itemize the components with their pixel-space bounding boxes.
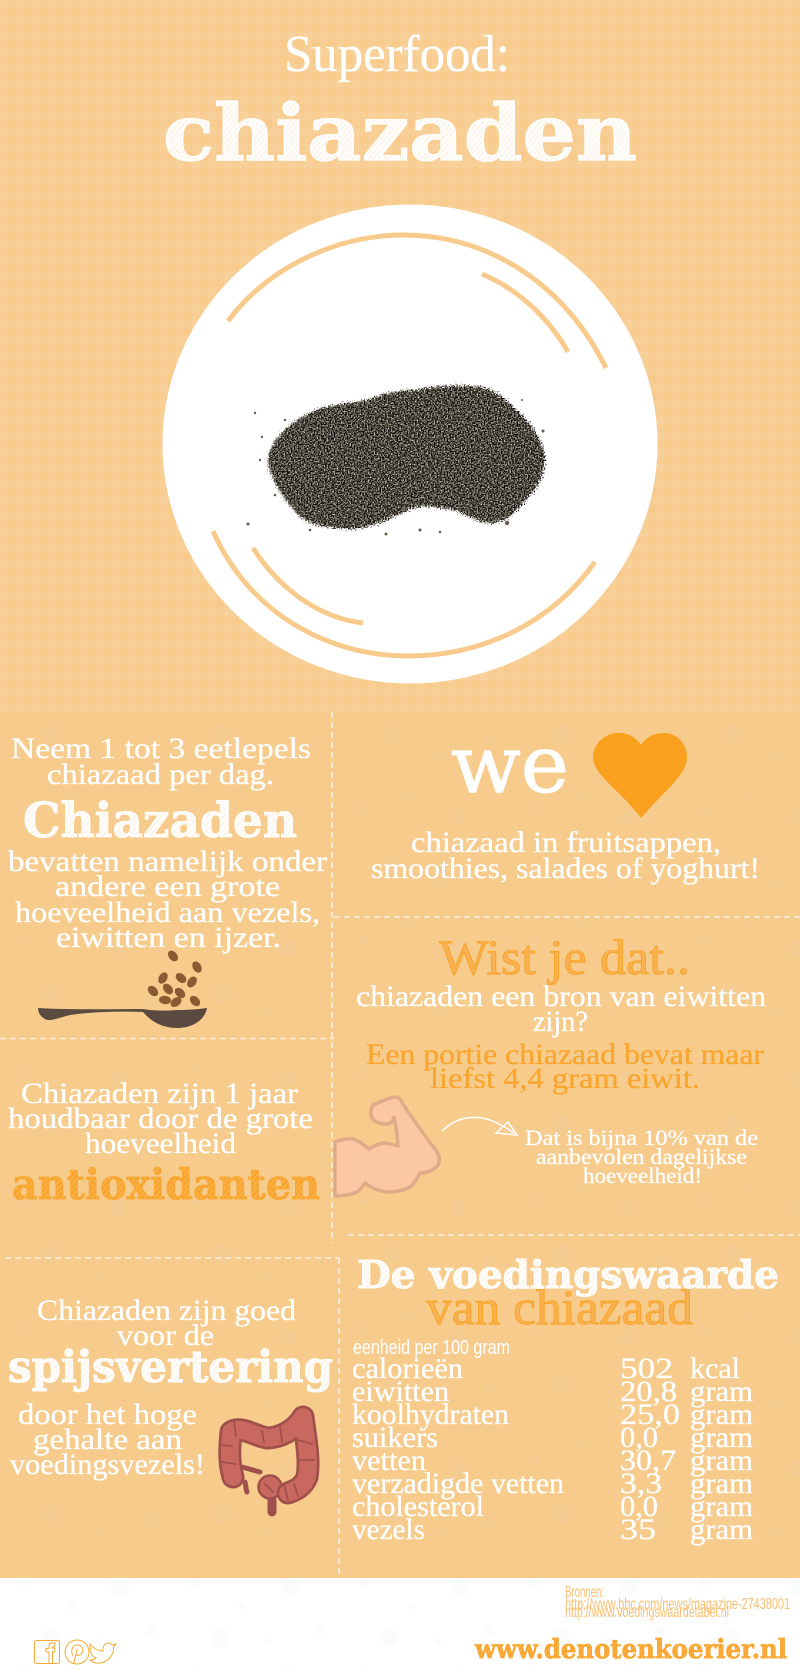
text: daily percentage: aanbevolen dagelijkse (536, 1144, 747, 1169)
heading: we: we (451, 718, 569, 811)
text: nutrients: hoeveelheid aan vezels, (15, 896, 320, 929)
plate disc (162, 204, 658, 684)
panel: we love (371, 718, 760, 885)
row: verzadigde vetten (352, 1467, 753, 1500)
row: cholesterol (352, 1490, 753, 1523)
text: nutrients (8, 845, 327, 954)
row: vetten: gram (690, 1444, 753, 1477)
row: eiwitten: gram (690, 1375, 753, 1408)
row: calorieën: 502 (620, 1352, 673, 1385)
text: protein source: chiazaden een bron van eiwitten (356, 980, 766, 1013)
spoon (38, 1008, 207, 1028)
text: nutrients: eiwitten en ijzer. (56, 921, 281, 954)
row: calorieën: kcal (690, 1352, 740, 1385)
text: daily percentage: hoeveelheid! (583, 1163, 702, 1188)
text: fibres (10, 1398, 205, 1481)
panel: digestion (8, 1294, 333, 1512)
sources (565, 1584, 790, 1621)
text: portion protein: liefst 4,4 gram eiwit. (430, 1062, 700, 1095)
text: portion protein: Een portie chiazaad bevat maar (366, 1038, 764, 1071)
row: suikers: 0,0 (620, 1421, 658, 1454)
row: koolhydraten: koolhydraten (352, 1398, 509, 1431)
row: cholesterol: cholesterol (352, 1490, 484, 1523)
row: calorieën (352, 1352, 740, 1385)
text: dose advice (11, 732, 311, 791)
panel: did you know (335, 929, 766, 1196)
title (163, 26, 637, 179)
text: nutrients: andere een grote (55, 870, 280, 903)
social icons (34, 1640, 116, 1664)
text: daily percentage: Dat is bijna 10% van de (525, 1125, 758, 1150)
text: dose advice: Neem 1 tot 3 eetlepels (11, 732, 311, 765)
row: koolhydraten (352, 1398, 753, 1431)
row: eiwitten: eiwitten (352, 1375, 449, 1408)
text: shelf life (8, 1077, 313, 1160)
rectal bowl (258, 1476, 282, 1498)
dashed section dividers (0, 712, 800, 1578)
text: daily percentage (525, 1125, 758, 1188)
plate rim arcs (213, 235, 606, 656)
text: shelf life: Chiazaden zijn 1 jaar (21, 1077, 298, 1110)
text: shelf life: houdbaar door de grote (8, 1102, 313, 1135)
row: cholesterol: gram (690, 1490, 753, 1523)
text: fibres: voedingsvezels! (10, 1448, 205, 1481)
heading: spijsvertering: spijsvertering (8, 1342, 333, 1393)
row: suikers: suikers (352, 1421, 438, 1454)
text: portion protein (366, 1038, 764, 1095)
row: calorieën: calorieën (352, 1352, 463, 1385)
text: digestion intro (37, 1294, 296, 1352)
text: shelf life: hoeveelheid (85, 1127, 236, 1160)
text: fibres: door het hoge (18, 1398, 197, 1431)
icon: spoon with seeds (38, 949, 207, 1028)
row: vezels: vezels (352, 1513, 425, 1546)
panel: daily dose (8, 732, 327, 1028)
white footer background (0, 1578, 800, 1670)
row: vezels: 35 (620, 1513, 656, 1546)
heading: De voedingswaarde: De voedingswaarde (357, 1252, 779, 1297)
colon outline (230, 1417, 308, 1493)
text: protein source (356, 980, 766, 1038)
text: digestion intro: voor de (117, 1319, 214, 1352)
panel: nutrition table (352, 1252, 779, 1546)
table rows (352, 1352, 753, 1546)
row: vezels: gram (690, 1513, 753, 1546)
icon: facebook (34, 1640, 60, 1664)
text: protein source: zijn? (533, 1005, 588, 1038)
arrow (442, 1117, 517, 1135)
row: vetten (352, 1444, 753, 1477)
plaid header background (0, 0, 800, 712)
appendix and rectum (242, 1467, 260, 1492)
row: eiwitten (352, 1375, 753, 1408)
colon folds (221, 1422, 314, 1500)
heading: Chiazaden: Chiazaden (23, 793, 297, 849)
text: nutrients: bevatten namelijk onder (8, 845, 327, 878)
text: digestion intro: Chiazaden zijn goed (37, 1294, 296, 1327)
text: serving ideas: smoothies, salades of yoghurt! (371, 852, 760, 885)
row: verzadigde vetten: gram (690, 1467, 753, 1500)
icon: twitter (90, 1643, 116, 1663)
row: suikers: gram (690, 1421, 753, 1454)
row: verzadigde vetten: verzadigde vetten (352, 1467, 564, 1500)
row: koolhydraten: gram (690, 1398, 753, 1431)
plate illustration (162, 204, 658, 684)
title line: Superfood: Superfood: (284, 26, 510, 83)
icon: pinterest (65, 1640, 89, 1664)
row: cholesterol: 0,0 (620, 1490, 658, 1523)
seeds (146, 949, 204, 1009)
chia seed pile (246, 386, 545, 536)
heading: van chiazaad: van chiazaad (426, 1279, 693, 1335)
row: vetten: 30,7 (620, 1444, 676, 1477)
row: verzadigde vetten: 3,3 (620, 1467, 662, 1500)
title line: chiazaden: chiazaden (163, 88, 637, 179)
row: eiwitten: 20,8 (620, 1375, 677, 1408)
colon fill (230, 1417, 308, 1493)
text: serving ideas: chiazaad in fruitsappen, (411, 826, 721, 859)
icon: intestines (221, 1417, 314, 1512)
heading: antioxidanten: antioxidanten (12, 1160, 320, 1209)
sources: Bronnen: (565, 1584, 604, 1601)
row: vezels (352, 1513, 753, 1546)
panel: antioxidants (8, 1077, 320, 1209)
unit note: eenheid per 100 gram (353, 1337, 510, 1359)
row: vetten: vetten (352, 1444, 426, 1477)
icon: flexed arm (335, 1097, 439, 1196)
peach content background (0, 712, 800, 1578)
footer (34, 1584, 790, 1665)
text: dose advice: chiazaad per dag. (47, 758, 274, 791)
text: fibres: gehalte aan (33, 1423, 182, 1456)
icon: heart (593, 733, 687, 818)
website url: www.denotenkoerier.nl (474, 1635, 787, 1665)
heading: Wist je dat: Wist je dat.. (439, 929, 690, 985)
row: suikers (352, 1421, 753, 1454)
text: serving ideas (371, 826, 760, 885)
scattered seeds (246, 399, 544, 536)
row: koolhydraten: 25,0 (620, 1398, 680, 1431)
